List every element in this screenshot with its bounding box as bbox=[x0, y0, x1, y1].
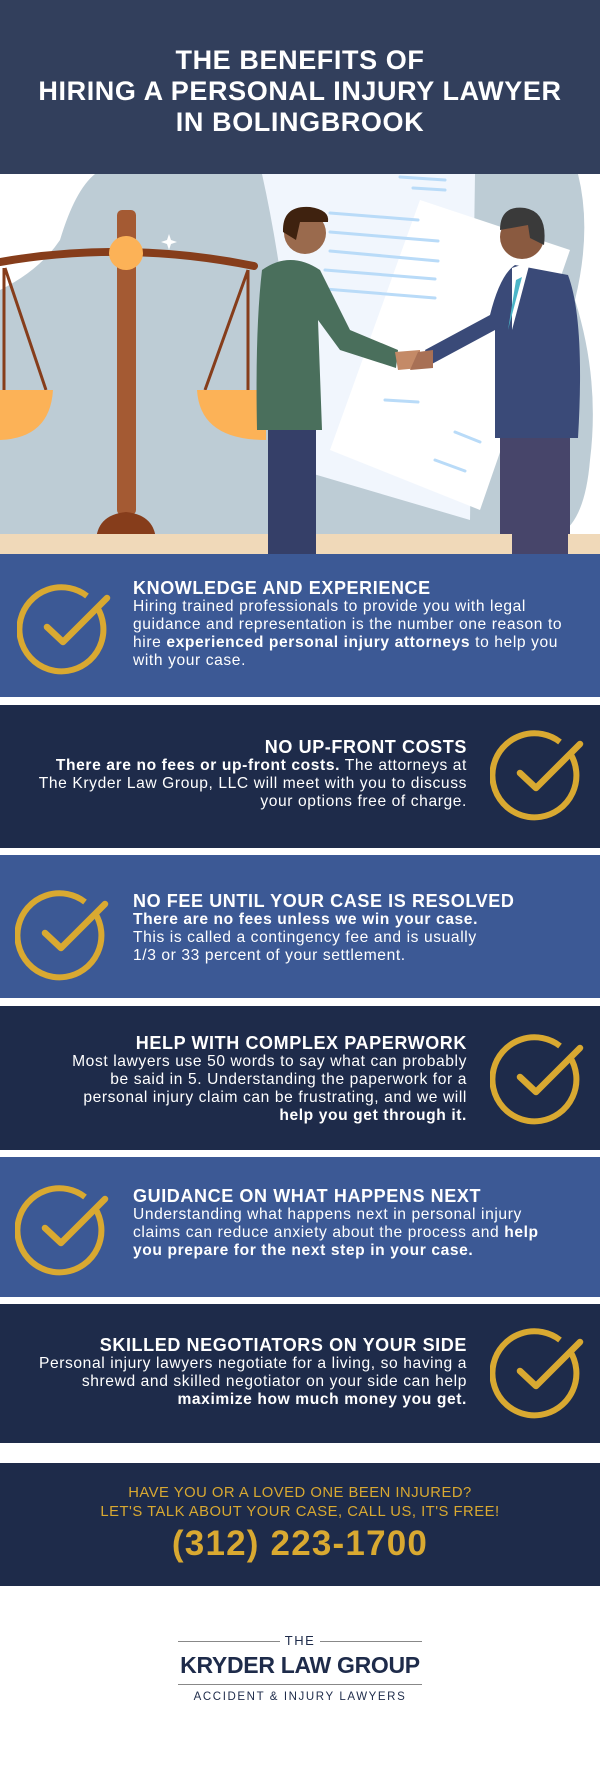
text block: This is called a contingency fee and is usually bbox=[133, 929, 477, 946]
panel: skilled negotiators bbox=[0, 1304, 600, 1443]
icon: check circle bbox=[490, 730, 584, 820]
panel: complex paperwork bbox=[0, 1006, 600, 1150]
text block: There are no fees unless we win your case. bbox=[133, 911, 478, 928]
logo: ACCIDENT & INJURY LAWYERS bbox=[194, 1691, 406, 1703]
icon: check circle bbox=[490, 1034, 584, 1124]
text block: maximize how much money you get. bbox=[177, 1391, 467, 1408]
icon: check circle bbox=[17, 584, 110, 674]
text block: Personal injury lawyers negotiate for a living, so having a bbox=[39, 1355, 467, 1372]
man in suit bbox=[410, 208, 580, 554]
text block: KNOWLEDGE AND EXPERIENCE bbox=[133, 578, 431, 598]
text block bbox=[133, 891, 514, 964]
text block: your options free of charge. bbox=[260, 793, 467, 810]
background blob bbox=[0, 174, 593, 534]
logo: KRYDER LAW GROUP bbox=[180, 1652, 420, 1678]
text block: NO UP-FRONT COSTS bbox=[265, 737, 467, 757]
text block: hire experienced personal injury attorneys to help you bbox=[133, 634, 558, 651]
text block bbox=[39, 737, 467, 810]
text block: guidance and representation is the number one reason to bbox=[133, 616, 562, 633]
scale bbox=[0, 210, 266, 543]
text block: be said in 5. Understanding the paperwork for a bbox=[110, 1071, 467, 1088]
text block: you prepare for the next step in your case. bbox=[133, 1242, 473, 1259]
illustration: handshake with scales bbox=[0, 174, 600, 554]
man in green jacket bbox=[257, 207, 420, 555]
panel: guidance on what happens next bbox=[0, 1157, 600, 1297]
logo: THE bbox=[285, 1633, 315, 1648]
text block bbox=[133, 578, 562, 669]
text block: personal injury claim can be frustrating, and we will bbox=[83, 1089, 467, 1106]
text block: 1/3 or 33 percent of your settlement. bbox=[133, 947, 406, 964]
text block: claims can reduce anxiety about the process and help bbox=[133, 1224, 539, 1241]
panel: no up-front costs bbox=[0, 705, 600, 848]
icon: check circle bbox=[15, 890, 108, 980]
text block bbox=[39, 1335, 467, 1408]
text block: Most lawyers use 50 words to say what can probably bbox=[72, 1053, 467, 1070]
title: THE BENEFITS OF bbox=[175, 45, 424, 75]
text block: with your case. bbox=[133, 652, 246, 669]
floor bbox=[0, 534, 600, 554]
callout: call to action bbox=[0, 1463, 600, 1586]
text block: help you get through it. bbox=[279, 1107, 467, 1124]
panel: knowledge and experience bbox=[0, 554, 600, 697]
text block: SKILLED NEGOTIATORS ON YOUR SIDE bbox=[100, 1335, 467, 1355]
logo bbox=[178, 1633, 422, 1703]
title: IN BOLINGBROOK bbox=[176, 107, 424, 137]
title bbox=[0, 0, 600, 174]
icon: check circle bbox=[15, 1185, 108, 1276]
text block: Hiring trained professionals to provide you with legal bbox=[133, 598, 526, 615]
text block: GUIDANCE ON WHAT HAPPENS NEXT bbox=[133, 1186, 481, 1206]
icon: check circle bbox=[490, 1328, 584, 1418]
cta text bbox=[100, 1485, 500, 1520]
text block bbox=[72, 1033, 467, 1124]
text block: NO FEE UNTIL YOUR CASE IS RESOLVED bbox=[133, 891, 514, 911]
cta text: LET'S TALK ABOUT YOUR CASE, CALL US, IT'S FREE! bbox=[100, 1504, 500, 1520]
text block: There are no fees or up-front costs. The attorneys at bbox=[56, 757, 467, 774]
text block bbox=[133, 1186, 539, 1259]
panel: no fee until resolved bbox=[0, 855, 600, 998]
document bbox=[262, 174, 570, 520]
text block: The Kryder Law Group, LLC will meet with you to discuss bbox=[39, 775, 467, 792]
title: HIRING A PERSONAL INJURY LAWYER bbox=[38, 76, 562, 106]
text block: Understanding what happens next in personal injury bbox=[133, 1206, 522, 1223]
text block: HELP WITH COMPLEX PAPERWORK bbox=[136, 1033, 467, 1053]
phone number: (312) 223-1700 bbox=[172, 1524, 428, 1563]
text block: shrewd and skilled negotiator on your side can help bbox=[82, 1373, 467, 1390]
cta text: HAVE YOU OR A LOVED ONE BEEN INJURED? bbox=[128, 1485, 472, 1501]
